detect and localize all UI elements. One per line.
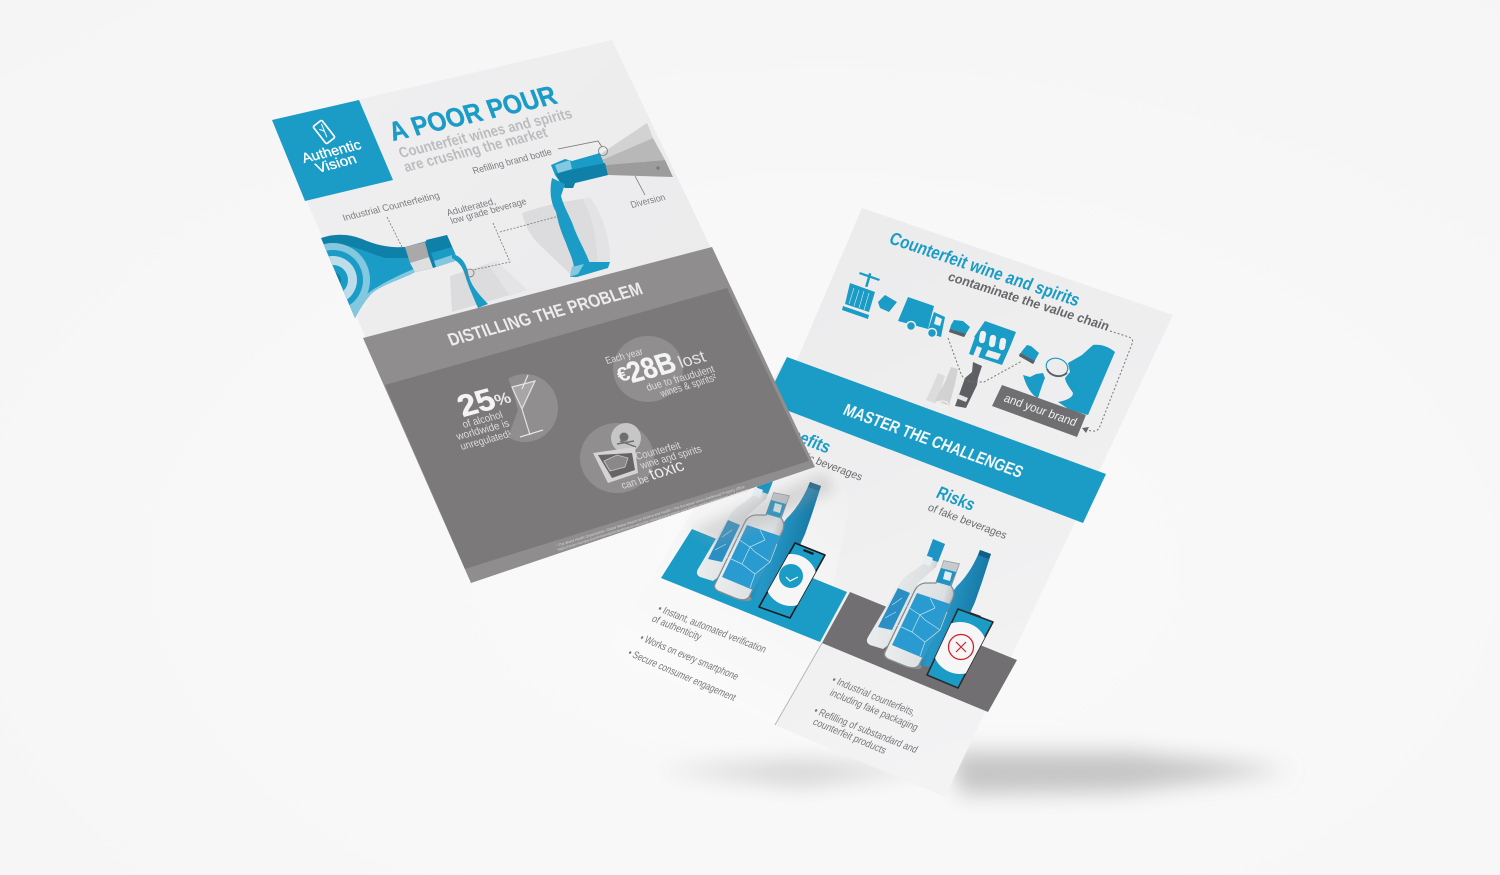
labels: low grade beverage — [449, 196, 529, 227]
risks list: • Refilling of substandard and — [812, 705, 920, 756]
labels: Diversion — [629, 192, 667, 211]
heading: benefits: of authentic beverages — [761, 436, 865, 484]
stat: toxic: toxic — [646, 456, 688, 484]
callout: and your brand — [992, 385, 1086, 437]
arrowhead — [1082, 427, 1089, 433]
risks phone — [927, 609, 993, 688]
stat: 25 percent — [452, 374, 558, 453]
icon: wine press — [842, 272, 880, 319]
labels: Industrial Counterfeiting — [341, 190, 441, 224]
icon: store — [969, 321, 1016, 365]
risks list: • Industrial counterfeits, — [829, 674, 918, 719]
risks bottles — [867, 539, 991, 672]
arrow 1 — [878, 295, 897, 312]
heading: benefits — [761, 418, 865, 484]
risks list: including fake packaging — [827, 687, 921, 734]
band: risks grey — [822, 592, 1017, 712]
cast shadow from front sheet — [690, 472, 835, 545]
heading: risks — [926, 483, 1009, 542]
icon: person drinking — [1023, 345, 1115, 415]
stat: 28 billion — [604, 336, 719, 402]
benefits list: of authenticity — [649, 613, 704, 643]
stat: 25 percent: 25 — [452, 382, 501, 423]
benefits list: • Secure consumer engagement — [625, 647, 738, 704]
stat: 28 billion: Each year — [604, 347, 645, 367]
band: master the challenges — [765, 357, 1106, 523]
heading: value chain: Counterfeit wine and spirits — [886, 228, 1083, 310]
stat: 28 billion: 28B — [622, 347, 681, 389]
heading: risks: Risks — [933, 483, 979, 515]
footnotes: ¹ The World Health Organization, Global Status Report on Alcohol and Health ² The European Union Intellectual Property Office — [556, 485, 745, 548]
stat: 28 billion: due to fraudulent — [644, 363, 717, 394]
illustration: pouring blue bottle — [321, 234, 488, 318]
stat: 25 percent: of alcohol — [460, 409, 505, 431]
heading: distilling the problem: DISTILLING THE PROBLEM — [445, 279, 646, 350]
heading: risks: of fake beverages — [926, 502, 1009, 542]
panel: value chain sheet — [610, 208, 1173, 797]
labels: Refilling brand bottle — [471, 147, 554, 177]
dark lower panel — [363, 247, 815, 583]
stat: toxic — [580, 423, 704, 493]
stat: toxic: can be — [619, 473, 651, 492]
stat: toxic: Counterfeit — [633, 440, 683, 463]
stat: 25 percent: unregulated¹ — [458, 428, 514, 453]
benefits phone — [759, 543, 825, 618]
stat: 28 billion: € — [613, 363, 634, 387]
band: master the challenges: MASTER THE CHALLENGES — [840, 400, 1026, 482]
illustration: refill bottle — [551, 123, 673, 277]
labels: Adulterated, — [445, 196, 498, 219]
sheet background — [272, 40, 815, 583]
arrow: dotted loop to brand — [948, 331, 1133, 431]
benefits list: • Instant, automated verification — [656, 603, 769, 656]
benefits list — [625, 603, 769, 704]
title: A POOR POUR — [384, 79, 561, 147]
left column background — [610, 357, 850, 725]
logo: authentic vision: Vision — [313, 150, 359, 176]
logo: authentic vision: Authentic — [299, 136, 363, 166]
icon: counterfeit bottles — [926, 362, 982, 408]
heading: value chain: contaminate the value chain — [946, 269, 1112, 334]
stat: 25 percent: % — [492, 389, 514, 410]
footnotes: https://euipo.europa.eu/ohimportal/en/web/observatory/ipr-infringement-wines-and-spirits-sector publications and findings — [557, 488, 749, 552]
stat: toxic: wine and spirits — [637, 443, 704, 472]
logo: authentic vision — [272, 100, 393, 201]
callout lines — [387, 141, 659, 277]
heading: benefits: Benefits — [769, 418, 834, 457]
arrow 2 — [949, 320, 970, 337]
floor shadow — [655, 752, 1290, 794]
labels — [341, 147, 667, 227]
stat: 28 billion: wines & spirits² — [657, 372, 719, 400]
column divider — [775, 643, 822, 725]
icon: truck — [898, 297, 945, 338]
benefits bottles — [697, 471, 821, 604]
arrow 3 — [1019, 345, 1039, 364]
subtitle: Counterfeit wines and spirits — [396, 105, 575, 162]
benefits list: • Works on every smartphone — [637, 632, 741, 683]
illustration: glasses — [450, 198, 610, 312]
risks list — [810, 674, 921, 757]
stat: 28 billion: lost — [675, 347, 709, 372]
callout: and your brand: and your brand — [1002, 391, 1079, 429]
subtitle: are crushing the market — [401, 124, 550, 176]
sheet background — [775, 208, 1173, 797]
panel: a poor pour sheet — [272, 40, 815, 583]
stat: 25 percent: worldwide is — [454, 418, 511, 443]
band: benefits blue — [661, 529, 847, 642]
risks list: counterfeit products — [810, 716, 889, 757]
